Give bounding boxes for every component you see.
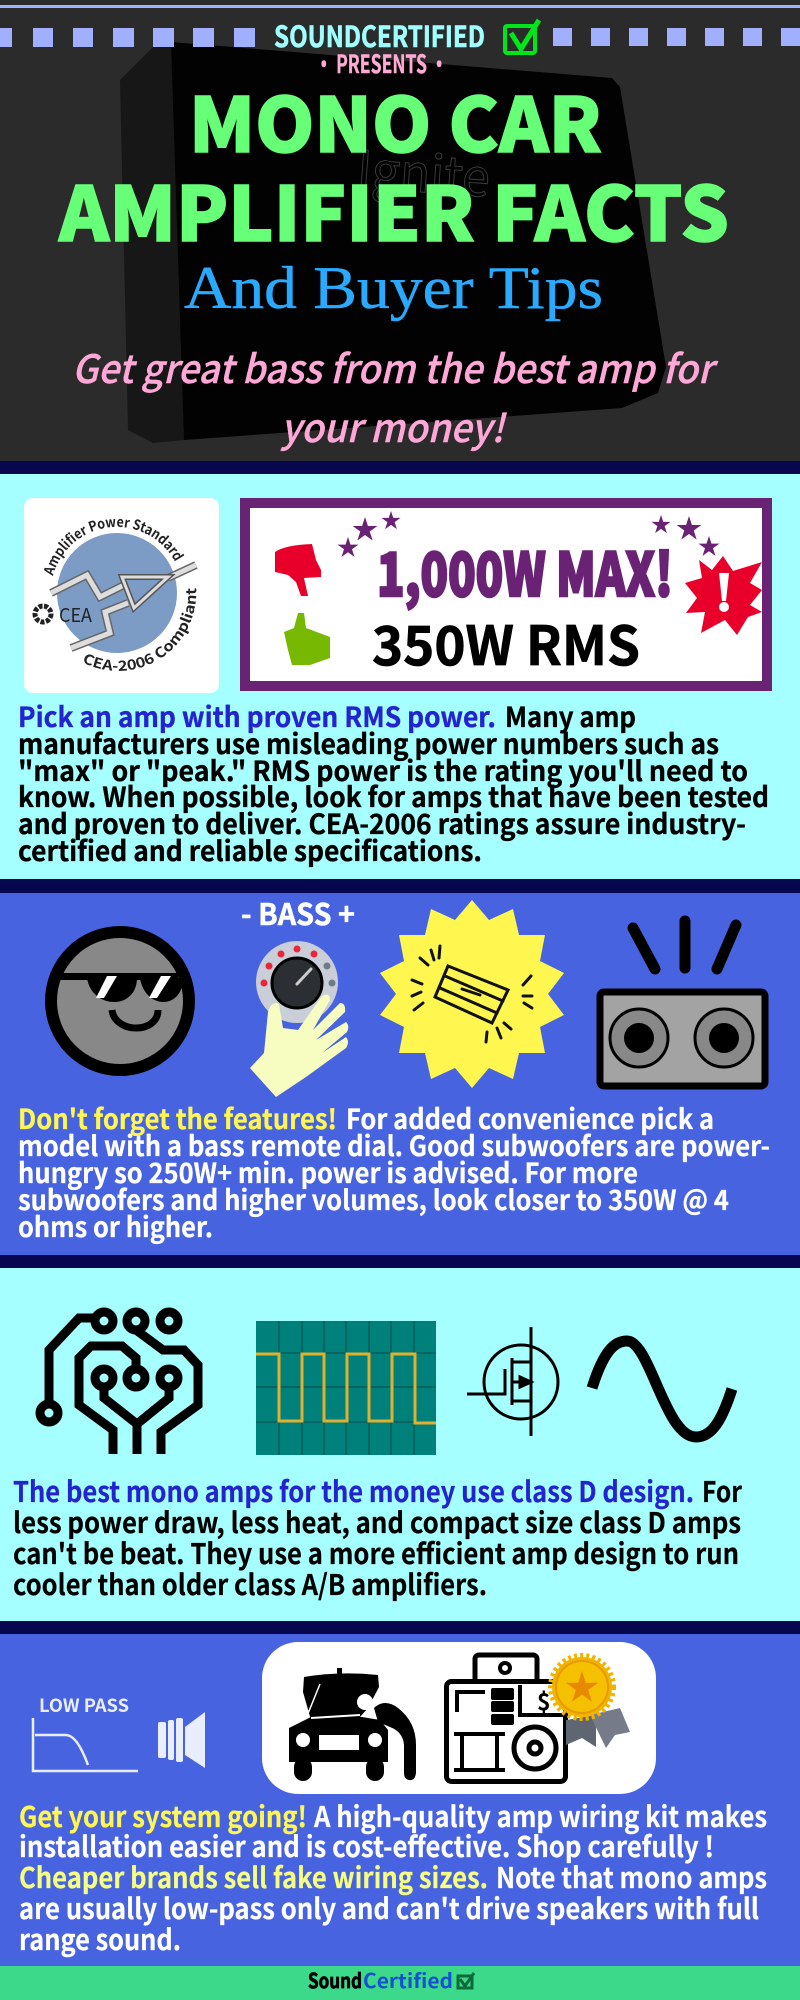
icon: starburst with amp — [380, 900, 564, 1088]
RMS rating: 350W RMS — [372, 602, 640, 681]
icon: circuit board — [40, 1312, 198, 1454]
icon: award ribbon — [551, 1656, 630, 1748]
text block: install: installation easier and is cost-effective. Shop carefully ! — [19, 1825, 714, 1866]
CEA-2006 badge: CEA — [59, 601, 92, 628]
text block: RMS power: Pick an amp with proven RMS power. — [18, 695, 496, 735]
icon: sine wave — [592, 1341, 732, 1437]
icon: oscilloscope square wave — [256, 1321, 436, 1455]
subtitle: And Buyer Tips — [184, 255, 603, 321]
icon: thumb down — [275, 544, 321, 596]
text block: class D: cooler than older class A/B amplifiers. — [13, 1563, 487, 1604]
panel: system install — [0, 1634, 800, 1966]
icon: speaker — [158, 1712, 205, 1768]
icon: footer check box — [458, 1973, 474, 1988]
text block: RMS power: know. When possible, look for amps that have been tested — [18, 775, 769, 815]
icon: alert burst — [685, 556, 762, 635]
icon: low pass graph: LOW PASS — [39, 1692, 129, 1718]
amplifier silhouette — [120, 42, 666, 443]
icon: mechanic and car — [289, 1668, 416, 1781]
text block: RMS power: "max" or "peak." RMS power is the rating you'll need to — [18, 749, 748, 789]
presents: • PRESENTS • — [315, 45, 448, 81]
text block: class D: less power draw, less heat, and compact size class D amps — [13, 1501, 741, 1542]
text block: install: Get your system going! — [19, 1795, 307, 1836]
icon: low pass graph — [33, 1692, 138, 1771]
text block: features: subwoofers and higher volumes, look closer to 350W @ 4 — [18, 1178, 729, 1218]
tagline — [72, 339, 719, 454]
text block: class D — [13, 1470, 742, 1604]
text block: class D: For — [702, 1470, 742, 1511]
tagline: your money! — [280, 398, 507, 454]
text block: class D: The best mono amps for the money use class D design. — [13, 1470, 694, 1511]
tagline: Get great bass from the best amp for — [72, 339, 719, 395]
icon: subwoofer box — [600, 921, 765, 1086]
panel: RMS power — [0, 474, 800, 879]
text block: install: Note that mono amps — [496, 1856, 767, 1897]
dashed strip — [0, 28, 800, 47]
white icon card — [262, 1642, 656, 1794]
power rating box — [245, 503, 767, 686]
icon: bass knob and hand — [250, 941, 348, 1097]
text block: install: Cheaper brands sell fake wiring sizes. — [19, 1856, 488, 1897]
panel: header — [0, 0, 800, 461]
text block: features — [18, 1097, 770, 1245]
text block: RMS power: certified and reliable specifications. — [18, 829, 482, 869]
brand name: SOUNDCERTIFIED — [274, 14, 485, 56]
title — [58, 65, 729, 263]
panel: features — [0, 890, 800, 1255]
text block: features: hungry so 250W+ min. power is advised. For more — [18, 1151, 638, 1191]
bass label: - BASS + — [241, 890, 355, 934]
title: MONO CAR — [189, 65, 602, 174]
text block: class D: can't be beat. They use a more efficient amp design to run — [13, 1532, 739, 1573]
text block: RMS power: Many amp — [505, 695, 636, 735]
text block: install: range sound. — [19, 1918, 181, 1959]
CEA-2006 badge — [24, 498, 219, 693]
CEA-2006 badge: Amplifier Power Standard — [44, 518, 184, 576]
text block: RMS power: manufacturers use misleading power numbers such as — [18, 722, 719, 762]
icon: MOSFET symbol — [467, 1327, 558, 1436]
text block: features: Don't forget the features! — [18, 1097, 337, 1137]
text block: features: For added convenience pick a — [346, 1097, 714, 1137]
max rating: 1,000W MAX! — [377, 527, 673, 614]
text block: RMS power — [18, 695, 769, 869]
icon: wiring kit: $ — [537, 1683, 551, 1717]
icon: wiring kit — [446, 1655, 568, 1782]
CEA-2006 badge: CEA-2006 Compliant — [84, 588, 196, 671]
text block: install — [19, 1795, 767, 1959]
icon: green check box — [505, 20, 539, 53]
title: AMPLIFIER FACTS — [58, 154, 729, 263]
text block: features: ohms or higher. — [18, 1205, 213, 1245]
icon: sunglasses face — [51, 932, 189, 1070]
amplifier silhouette: Ignite — [355, 128, 493, 212]
text block: RMS power: and proven to deliver. CEA-2006 ratings assure industry- — [18, 802, 746, 842]
icon: thumb up — [284, 613, 330, 665]
panel: class D design — [0, 1268, 800, 1621]
footer logo text: Sound — [308, 1965, 362, 1994]
icon: stars — [338, 511, 719, 557]
footer — [0, 1965, 800, 2000]
footer logo text — [308, 1965, 453, 1994]
footer logo text: Certified — [363, 1965, 453, 1994]
